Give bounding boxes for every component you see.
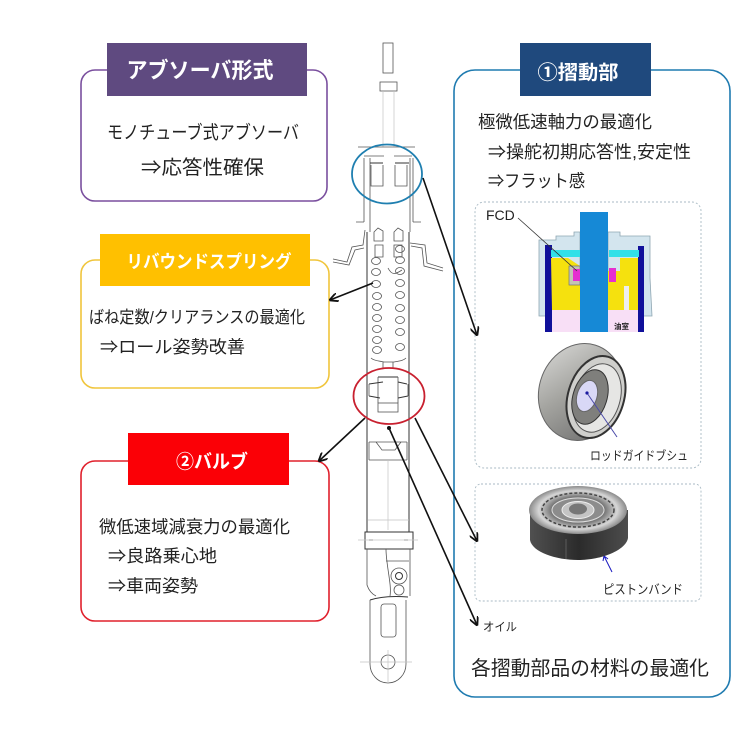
dashed panel: rod guide xyxy=(475,202,701,468)
label: oil chamber: 油室 xyxy=(614,321,629,331)
heading: sliding parts: ①摺動部 xyxy=(538,62,618,84)
piston band part xyxy=(529,486,683,597)
rod guide cross-section xyxy=(486,207,652,332)
lower body xyxy=(367,549,410,600)
text: absorber description: モノチューブ式アブソーバ xyxy=(107,122,299,143)
collar xyxy=(358,532,418,549)
rod guide bushing xyxy=(527,333,688,463)
dashed panel: piston band xyxy=(475,484,701,601)
heading: absorber type: アブソーバ形式 xyxy=(126,58,274,83)
callout ring: sliding part xyxy=(352,144,422,204)
arrow: to rod guide xyxy=(423,178,477,335)
panel: absorber type xyxy=(81,43,327,201)
panel: valve xyxy=(81,433,329,621)
heading: absorber type xyxy=(107,43,307,96)
text: valve description: ⇒車両姿勢 xyxy=(108,576,199,596)
label: rod guide bushing: ロッドガイドブシュ xyxy=(590,448,688,463)
text: absorber description: ⇒応答性確保 xyxy=(141,157,265,179)
text: sliding parts description: 極微低速軸力の最適化 xyxy=(478,112,652,132)
spring seat wings xyxy=(333,230,443,274)
shock absorber line drawing xyxy=(333,43,443,684)
arrow: to piston band xyxy=(415,418,477,541)
text: valve description xyxy=(99,517,290,596)
heading: valve: ②バルブ xyxy=(176,450,248,473)
label: FCD xyxy=(486,207,577,271)
outer tube xyxy=(367,232,409,532)
lower chamber xyxy=(368,442,409,530)
text: valve description: 微低速域減衰力の最適化 xyxy=(99,517,290,537)
conclusion text: 各摺動部品の材料の最適化 xyxy=(471,657,709,680)
oil pointer dot xyxy=(387,426,391,430)
text: sliding parts description xyxy=(478,112,691,191)
heading: sliding parts xyxy=(520,43,651,96)
label: FCD: FCD xyxy=(486,207,515,223)
heading: rebound spring xyxy=(100,234,310,286)
panel: sliding parts xyxy=(454,43,730,697)
text: rebound description: ばね定数/クリアランスの最適化 xyxy=(89,308,305,327)
arrow: to valve panel xyxy=(319,418,365,461)
upper mount xyxy=(356,147,421,257)
arrow: to rebound spring xyxy=(330,283,373,300)
heading: rebound spring: リバウンドスプリング xyxy=(126,251,292,272)
panel: rebound spring xyxy=(81,234,329,388)
text: sliding parts description: ⇒フラット感 xyxy=(488,171,585,191)
lower eye xyxy=(360,600,412,684)
heading: valve xyxy=(128,433,289,485)
text: rebound description xyxy=(89,308,305,357)
top stud xyxy=(380,43,397,147)
text: valve description: ⇒良路乗心地 xyxy=(108,546,217,566)
callout ring: valve xyxy=(354,368,424,424)
text: sliding parts description: ⇒操舵初期応答性,安定性 xyxy=(488,142,691,162)
label: piston band: ピストンバンド xyxy=(603,582,683,597)
label: oil: オイル xyxy=(483,620,517,634)
arrow: to oil xyxy=(389,428,477,625)
text: rebound description: ⇒ロール姿勢改善 xyxy=(100,337,245,357)
piston xyxy=(369,358,408,412)
coil spring xyxy=(372,246,404,354)
text: absorber description xyxy=(107,122,299,179)
